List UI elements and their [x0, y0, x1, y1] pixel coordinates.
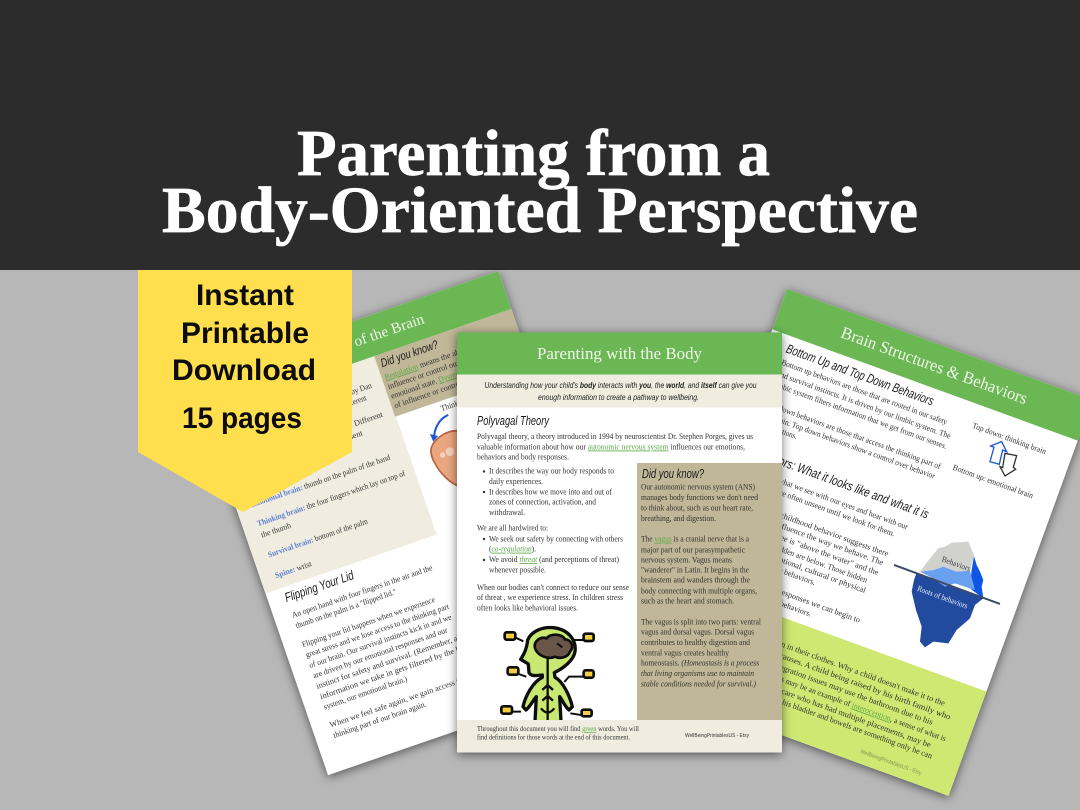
- panel: left page, hand model of the brain: [191, 271, 635, 775]
- icon: up and down arrows: [990, 442, 1017, 476]
- did you know box text: that living organisms use to maintain: [641, 669, 754, 678]
- did you know box text: The vagus is a cranial nerve that is a: [641, 535, 749, 544]
- icon: hand fist with arrow: [430, 415, 460, 487]
- left page flipping your lid text: Flipping your lid happens when we experience: [301, 595, 436, 649]
- left page beige definitions: the thumb: [260, 521, 292, 539]
- left page heading: Hand Model of the Brain: [276, 311, 427, 377]
- left page beige definitions: Emotional brain: thumb on the palm of the hand: [249, 453, 391, 509]
- did you know box text: brainstem and wanders through the: [641, 576, 750, 585]
- polyvagal theory text: valuable information about how our autonomic nervous system influences our emotions,: [477, 442, 745, 452]
- did you know box text: body connecting with multiple organs,: [641, 586, 757, 595]
- left page did you know: Regulation means the ability to: [383, 341, 481, 382]
- top down and bottom up labels: [952, 420, 1050, 500]
- title band: [0, 0, 1080, 270]
- left page did you know: Did you know?: [379, 337, 440, 370]
- did you know box text: vagus and dorsal vagus. Dorsal vagus: [641, 628, 754, 637]
- behaviors text: The iceberg of childhood behavior suggests there: [731, 493, 890, 559]
- badge: instant printable download: Download: [172, 354, 316, 387]
- did you know box text: manages body functions we don't need: [641, 493, 758, 502]
- polyvagal theory text: behaviors and body responses.: [477, 452, 569, 462]
- polyvagal theory text: We are all hardwired to:: [477, 524, 548, 533]
- badge: instant printable download: 15 pages: [182, 402, 302, 435]
- panel: left page, hand model of the brain: Thinking brain: [440, 390, 486, 413]
- bottom up and top down text: [758, 341, 963, 491]
- footer note: Throughout this document you will find green words. You will: [477, 725, 639, 733]
- behaviors text: Root causes are often unseen until we look for them.: [738, 473, 896, 538]
- iceberg labels: [916, 550, 981, 611]
- lime example text: Another child with sensory integration issues may use the bathroom due to his: [682, 628, 934, 727]
- badge: instant printable download: Printable: [181, 317, 309, 350]
- left page beige definitions: The hand model of the brain was developed by Dan: [225, 381, 373, 439]
- panel: center page, parenting with the body: [457, 332, 782, 752]
- polyvagal theory text: withdrawal.: [489, 508, 525, 517]
- left page flipping your lid text: are driven by our emotional responses and our: [312, 626, 449, 680]
- did you know box text: Our autonomic nervous system (ANS): [641, 482, 755, 491]
- lime example text: A child may use the bathroom in their clothes. Why a child doesn't make it to the: [690, 607, 947, 708]
- left page beige definitions: areas of our hand can easily represent: [239, 428, 365, 479]
- lime example text: differences in body awareness. This may be an example of interoception, a sense of what is: [678, 638, 947, 743]
- bottom up and top down text: Bottom up behaviors are those that are rooted in our safety: [780, 358, 949, 427]
- center page heading: Parenting with the Body: [537, 344, 703, 363]
- top down and bottom up labels: Top down: thinking brain: [971, 421, 1047, 456]
- did you know box text: stable conditions needed for survival.): [641, 680, 756, 689]
- lime example text: [665, 607, 959, 781]
- left page flipping your lid text: great stress and we lose access to the thinking part: [304, 602, 451, 660]
- bottom up and top down text: and emotions.: [758, 419, 799, 441]
- left page beige definitions: parts of the brain and their functions. Different: [235, 410, 385, 469]
- center page intro strip: [484, 380, 757, 402]
- left page did you know: emotional state. Dysregulation: [390, 362, 481, 401]
- polyvagal theory text: [477, 414, 753, 613]
- footer note: [477, 725, 749, 742]
- did you know box text: such as the heart and stomach.: [641, 597, 734, 606]
- did you know box text: nervous system. Vagus means: [641, 555, 732, 564]
- behaviors text: change the roots of these behaviors.: [703, 571, 813, 619]
- title: [162, 117, 918, 247]
- icon: iceberg: [894, 542, 1000, 647]
- behaviors text: are things that influence the way we behave. The: [727, 503, 885, 567]
- did you know box text: breathing, and digestion.: [641, 514, 716, 523]
- did you know box text: The vagus is split into two parts: ventral: [641, 617, 762, 626]
- polyvagal theory text: Polyvagal Theory: [477, 414, 550, 428]
- top down and bottom up labels: Bottom up: emotional brain: [952, 463, 1035, 500]
- bottom up and top down text: limbic system filters information that we get from our senses.: [772, 379, 948, 451]
- bottom up and top down text: Top down behaviors are those that access the thinking part of: [765, 399, 942, 471]
- left page beige definitions: Survival brain: bottom of the palm: [267, 516, 369, 559]
- lime example text: bathroom has different root causes. A child being raised by his birth family who: [686, 617, 952, 721]
- did you know box text: to think about, such as our heart rate,: [641, 503, 753, 512]
- lime example text: inside the body. A child in foster care who has had multiple placements, may be: [674, 648, 933, 749]
- bottom up and top down text: and survival instincts. It is driven by our limbic system. The: [776, 369, 952, 441]
- footer note: WellBeingPrintablesUS - Etsy: [685, 733, 749, 739]
- icon: body and nervous system figure: [501, 628, 594, 722]
- lime example text: WellBeingPrintablesUS - Etsy: [859, 749, 922, 777]
- behaviors text: The roots that are hidden are below. Those hidden: [720, 523, 869, 585]
- left page flipping your lid text: thumb on the palm is a "flipped lid.": [294, 587, 397, 630]
- left page flipping your lid text: of our brain. Our survival instincts kick in and we: [308, 612, 453, 670]
- left page flipping your lid text: Flipping Your Lid: [283, 567, 356, 605]
- center page intro strip: enough information to create a pathway to wellbeing.: [538, 392, 699, 402]
- polyvagal theory text: whenever possible.: [489, 565, 546, 574]
- badge: instant printable download: Instant: [196, 279, 294, 312]
- bottom up and top down text: our brain. Top down behaviors show a control over behavior: [761, 410, 937, 481]
- footer note: find definitions for those words at the end of this document.: [477, 734, 630, 742]
- left page beige definitions: [225, 380, 425, 580]
- iceberg labels: Behaviors: [941, 555, 972, 573]
- right page heading: Brain Structures & Behaviors: [838, 323, 1030, 408]
- behaviors text: part that we can see is "above the water" and the: [724, 513, 880, 577]
- left page beige definitions: Thinking brain: the four fingers which lay on top of: [256, 469, 407, 528]
- did you know box text: "wanderer" in Latin. It begins in the: [641, 565, 749, 574]
- polyvagal theory text: We seek out safety by connecting with others: [489, 534, 623, 543]
- behaviors text: Behaviors: What it looks like and what it is: [747, 442, 931, 522]
- polyvagal theory text: zones of connection, activation, and: [489, 498, 596, 507]
- polyvagal theory text: When our bodies can't connect to reduce our sense: [477, 583, 629, 592]
- behaviors text: Behavior is what we see with our eyes and hear with our: [742, 463, 910, 532]
- left page beige definitions: Siegel. Our hand can show and represent different: [229, 393, 368, 449]
- polyvagal theory text: It describes the way our body responds to: [489, 467, 614, 476]
- behaviors text: [703, 442, 931, 645]
- did you know box text: ventral vagus creates healthy: [641, 648, 730, 657]
- behaviors text: By looking at our own responses we can begin to: [706, 561, 862, 625]
- did you know box text: major part of our parasympathetic: [641, 545, 745, 554]
- left page flipping your lid text: system, our emotional brain.): [322, 674, 409, 712]
- left page beige definitions: Spine: wrist: [274, 559, 313, 580]
- did you know box text: homeostasis. (Homeostasis is a process: [641, 659, 759, 668]
- behaviors text: causes might be emotional, cultural or physical: [717, 533, 868, 595]
- iceberg labels: Roots of behaviors: [916, 584, 969, 611]
- left page flipping your lid text: thinking part of our brain again.: [332, 699, 428, 740]
- polyvagal theory text: often looks like behavioral issues.: [477, 604, 578, 613]
- polyvagal theory text: We avoid threat (and perceptions of threat): [489, 555, 619, 564]
- behaviors text: often the drivers of the behaviors.: [713, 542, 817, 587]
- lime example text: feeling that life is out of control and his bladder and bowels are something only he can: [671, 658, 933, 760]
- center page intro strip: Understanding how your child's body interacts with you, the world, and itself can give you: [484, 380, 757, 390]
- bottom up and top down text: Bottom Up and Top Down Behaviors: [784, 341, 936, 409]
- polyvagal theory text: It describes how we move into and out of: [489, 487, 612, 496]
- left page did you know: influence or control our: [386, 358, 461, 391]
- did you know box text: contributes to healthy digestion and: [641, 638, 750, 647]
- badge: instant printable download: [138, 270, 352, 512]
- did you know box text: Did you know?: [642, 467, 704, 481]
- polyvagal theory text: daily experiences.: [489, 477, 543, 486]
- polyvagal theory text: Polyvagal theory, a theory introduced in 1994 by neuroscientist Dr. Stephen Porges, gives us: [477, 432, 753, 441]
- left page flipping your lid text: [283, 537, 491, 740]
- left page flipping your lid text: When we feel safe again, we gain access to the: [328, 671, 475, 729]
- did you know box text: [641, 467, 762, 689]
- title: Parenting from a: [297, 117, 770, 190]
- left page flipping your lid text: An open hand with four fingers in the air and the: [291, 563, 434, 620]
- left page flipping your lid text: information we take in gets filtered by the limbic: [319, 639, 478, 701]
- left page flipping your lid text: instinct for safety and survival. (Remember, all the: [315, 628, 474, 691]
- panel: right page, brain structures and behaviors: [643, 289, 1080, 796]
- title: Body-Oriented Perspective: [162, 174, 918, 247]
- left page did you know: [378, 325, 490, 410]
- left page did you know: of influence or control: [393, 378, 464, 410]
- polyvagal theory text: (co-regulation).: [489, 545, 536, 554]
- polyvagal theory text: of threat , we experience stress. In children stress: [477, 593, 623, 602]
